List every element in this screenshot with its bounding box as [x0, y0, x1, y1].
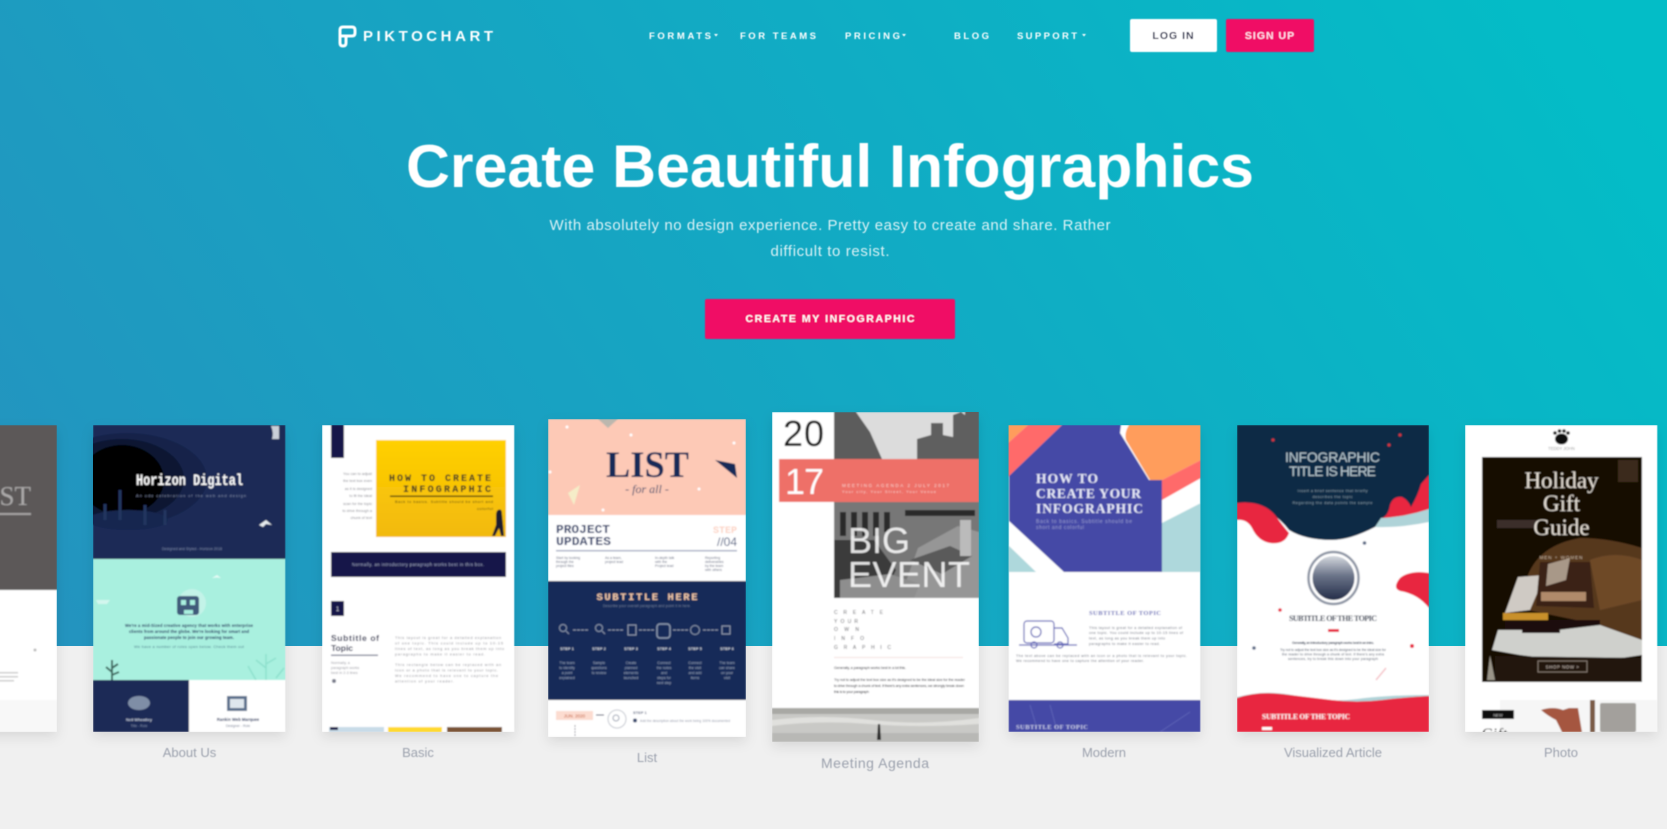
- hero subtitle: With absolutely no design experience. Pretty easy to create and share. Rather: [550, 217, 1110, 234]
- template card: List: Reporting: [705, 556, 720, 560]
- card labels: [163, 745, 1578, 771]
- section paragraph: We recommend to have one to capture the attention of your reader.: [1016, 659, 1144, 663]
- nav links: SUPPORT: [1017, 31, 1077, 42]
- footer band: [1008, 700, 1200, 732]
- teal wave right: [1375, 505, 1429, 527]
- template card: Visualized Article: [1237, 425, 1429, 732]
- step descriptions: questions: [591, 666, 607, 670]
- confetti dots: [1278, 608, 1414, 648]
- body text: This rectangle below can be replaced with an: [395, 662, 501, 667]
- template card: Basic: Topic: [331, 643, 353, 653]
- template card: List: As a team,: [605, 556, 622, 560]
- step descriptions: visit: [724, 676, 730, 680]
- template card: Basic: HOW TO CREATE: [389, 474, 491, 485]
- template card: Modern: SUBTITLE OF TOPIC: [1016, 724, 1088, 731]
- card labels: Visualized Article: [1284, 745, 1382, 760]
- step descriptions: on your: [721, 671, 734, 675]
- template card: Basic: Normally, an introductory paragraph works best in this box.: [352, 562, 484, 567]
- project updates: PROJECT: [556, 524, 610, 537]
- nav links: PRICING: [845, 31, 900, 42]
- paragraph text: this is to your paragraph: [834, 690, 869, 694]
- template card: cropped gray card: [0, 425, 57, 732]
- side text: to fit the ideal: [349, 494, 372, 498]
- spaced text: OWN: [834, 627, 859, 633]
- shop now button: SHOP NOW >: [1546, 664, 1579, 670]
- section paragraph: paragraphs to make it easier to read.: [1089, 642, 1160, 646]
- bottom product row: [1500, 700, 1657, 732]
- template card: Visualized Article: Try not to adjust the text box size as it's designed to be the ideal size for: [1280, 648, 1387, 652]
- timeline row: [556, 711, 593, 720]
- side text: You can to adjust: [343, 472, 373, 476]
- template card: Visualized Article: Generally, an introductory paragraph works best in an intro.: [1292, 641, 1374, 645]
- template card: List: through the: [556, 560, 574, 564]
- side text: as it is designed: [345, 487, 372, 491]
- step descriptions: explained: [559, 676, 575, 680]
- logo: [340, 27, 493, 46]
- template card: Meeting Agenda: EVENT: [848, 554, 970, 595]
- step labels: STEP 5: [688, 646, 703, 651]
- step labels: STEP 2: [592, 646, 607, 651]
- geometric header: [1008, 425, 1201, 572]
- section paragraph: The text above can be replaced with an icon or a photo that is relevant to your topic.: [1016, 654, 1187, 658]
- paragraph text: Generally, a paragraph works best in a lot this.: [834, 666, 906, 670]
- template card: List: SUBTITLE HERE: [596, 592, 698, 604]
- log in button: [1130, 19, 1217, 52]
- body text: [395, 635, 504, 684]
- photo title: Gift: [1543, 491, 1581, 516]
- template card: Visualized Article: TITLE IS HERE: [1289, 463, 1376, 479]
- template card: Modern: HOW TO: [1036, 471, 1098, 486]
- page background: light gray floor: [0, 646, 1667, 829]
- photo title: Guide: [1533, 515, 1590, 540]
- hero title: Create Beautiful Infographics: [406, 133, 1254, 200]
- card labels: List: [637, 750, 658, 765]
- card labels: Basic: [402, 745, 434, 760]
- paragraph text: Try not to adjust the text box size as it's designed to be the ideal size for the reader: [834, 678, 966, 682]
- mint panel: [93, 559, 286, 680]
- call to action button: CREATE MY INFOGRAPHIC: [746, 313, 915, 325]
- body text: This layout is great for a detailed explanation: [395, 635, 501, 640]
- template card: List: STEP: [713, 526, 737, 537]
- template card: Basic: colorful: [477, 506, 493, 511]
- spaced text: CREATE: [834, 610, 884, 616]
- section paragraph: text, as long as you break them up into: [1089, 636, 1165, 640]
- template card: About Us: Horizon Digital: [136, 472, 243, 490]
- template card: Basic: INFOGRAPHIC: [403, 485, 491, 496]
- side text: to drive through a: [342, 509, 373, 513]
- intro band: [331, 552, 506, 577]
- step labels: STEP 3: [624, 646, 639, 651]
- template card: Basic: 1: [336, 607, 340, 613]
- section number: [331, 601, 344, 616]
- template card: List: - for all -: [625, 482, 669, 496]
- spaced text: GRAPHIC: [834, 645, 891, 651]
- template card: List: In-depth talk: [655, 556, 675, 560]
- body text: lines of text, as long as you break them up into: [395, 646, 504, 651]
- template card: About Us: We have a number of roles open below. Check them out: [134, 644, 245, 649]
- step descriptions: [559, 661, 735, 685]
- step labels: STEP 4: [657, 646, 672, 651]
- spaced text: [834, 610, 891, 651]
- section paragraph: one topic. You could include up to 10-15 lines of: [1089, 631, 1184, 635]
- card labels: Meeting Agenda: [821, 755, 929, 771]
- step descriptions: items: [691, 676, 699, 680]
- nav links: BLOG: [954, 31, 989, 42]
- step descriptions: launched: [624, 676, 638, 680]
- sign up button: [1226, 19, 1314, 52]
- template card: Basic: Normally, a: [331, 661, 351, 665]
- shop now button: [1538, 661, 1587, 672]
- step descriptions: next step: [657, 681, 671, 685]
- peach title panel: [548, 419, 746, 515]
- template card: Basic: paragraph works: [331, 666, 359, 670]
- template card: List: UPDATES: [556, 536, 611, 549]
- template card: About Us: Neil Wheatley: [126, 717, 153, 722]
- bottom landscape photo: [772, 708, 979, 742]
- hero block: [406, 133, 1254, 339]
- side text: chunk of text: [350, 516, 373, 520]
- dark wave header: [1237, 425, 1429, 540]
- step descriptions: and: [661, 671, 667, 675]
- step descriptions: Connect: [688, 661, 702, 665]
- template card: List: deliverables: [705, 560, 724, 564]
- sign up button: SIGN UP: [1245, 30, 1295, 42]
- template card: Meeting Agenda: MEETING AGENDA 2 JULY 2017: [842, 483, 949, 488]
- step labels: [560, 646, 735, 651]
- template card: About Us: Designed and Styled - Horizon 2018: [162, 547, 222, 551]
- page background: blue-teal gradient: [0, 0, 1667, 646]
- call to action button: [705, 299, 955, 339]
- red blob right: [1396, 572, 1429, 608]
- template card: List: Project lead: [655, 564, 674, 568]
- icon: paw logo: [1553, 429, 1570, 444]
- coral band: [779, 459, 979, 502]
- step descriptions: steps for: [657, 676, 672, 680]
- template card: Photo: TEDDY JOHN: [1548, 446, 1575, 451]
- template card: About Us: An ode celebration of the web and design: [136, 493, 246, 498]
- template card: Photo: NEW: [1493, 712, 1503, 718]
- nav links: FOR TEAMS: [740, 31, 816, 42]
- step descriptions: planned: [625, 666, 637, 670]
- step descriptions: elements: [624, 671, 638, 675]
- red splash right: [1381, 475, 1429, 518]
- template card: Meeting Agenda: Your city, Your Street, Your Venue: [842, 489, 937, 494]
- step descriptions: the notes: [657, 666, 672, 670]
- template card: Modern: Back to basics. Subtitle should be: [1036, 519, 1132, 525]
- template card: List: //04: [717, 535, 737, 549]
- template card: Visualized Article: describes the topic: [1312, 495, 1353, 499]
- icon: delivery truck: [1019, 621, 1077, 648]
- step descriptions: to identify: [559, 666, 575, 670]
- bottom red wave: [1237, 693, 1429, 709]
- template card: About Us: Rankin Web Marquee: [217, 717, 260, 722]
- template card: Meeting Agenda: [772, 410, 979, 742]
- section paragraph: [1016, 626, 1187, 663]
- black and white city photo: [834, 410, 979, 598]
- logo wordmark: PIKTOCHART: [363, 28, 493, 45]
- template card: List: LIST: [606, 445, 689, 486]
- template card: Visualized Article: SUBTITLE OF THE TOPIC: [1262, 712, 1350, 721]
- step descriptions: to review: [592, 671, 607, 675]
- step descriptions: Connect: [657, 661, 671, 665]
- dark product photo: [1482, 457, 1642, 682]
- section subtitle: SUBTITLE OF TOPIC: [1089, 610, 1161, 617]
- paragraph text: [834, 666, 966, 694]
- template card: Modern: INFOGRAPHIC: [1036, 501, 1143, 516]
- step descriptions: The team: [719, 661, 735, 665]
- side text: the text box even: [343, 479, 372, 483]
- template card: About Us: Title - Role: [131, 724, 147, 728]
- year 17: 17: [785, 461, 824, 502]
- template card: Modern: short and colorful: [1036, 525, 1084, 531]
- body text: attention of your reader.: [395, 678, 454, 684]
- body text: We recommend to have one to capture the: [395, 673, 498, 678]
- header panel: [93, 425, 286, 559]
- step descriptions: a point: [562, 671, 572, 675]
- template card: List: by the team: [705, 564, 723, 568]
- spaced text: INFO: [834, 636, 864, 642]
- step icons and arrows: [560, 624, 730, 638]
- step labels: STEP 6: [720, 646, 735, 651]
- hero subtitle: difficult to resist.: [770, 243, 890, 260]
- yellow title panel: [376, 440, 506, 537]
- bottom images: [329, 727, 384, 732]
- template card: About Us: Designer - Role: [226, 724, 250, 728]
- body text: of one topic. This could include up to 10-15: [395, 640, 503, 646]
- nav links: [649, 31, 1086, 42]
- template card: Visualized Article: Regarding the data points the sample: [1292, 501, 1372, 505]
- year 20: 20: [783, 413, 824, 454]
- template card: About Us: passionate people to join our growing team.: [144, 635, 234, 640]
- card labels: About Us: [163, 745, 217, 760]
- side text: scan for the topic: [343, 502, 372, 506]
- template card: Modern: [1008, 425, 1201, 732]
- template card: Photo: MEN + WOMEN: [1540, 555, 1583, 560]
- circular image: [1308, 552, 1358, 604]
- template card: List: with the: [655, 560, 667, 564]
- template card: About Us: [91, 425, 288, 739]
- step descriptions: the visit: [689, 666, 701, 670]
- template card: Basic: best in 2-3 lines: [331, 671, 358, 675]
- template card: Photo: [1465, 425, 1658, 743]
- template card: About Us: clients from around the globe. We're looking for smart and: [129, 629, 249, 634]
- card labels: Photo: [1544, 745, 1578, 760]
- section paragraph: This layout is great for a detailed explanation of: [1089, 626, 1183, 630]
- step descriptions: Sample: [593, 661, 605, 665]
- hero subtitle: [550, 217, 1110, 260]
- template card: List: Add the description about the work being 100% documented: [640, 719, 730, 723]
- template card: List: JUN. 2020: [564, 714, 586, 718]
- photo title: [1524, 468, 1599, 540]
- template card: Modern: CREATE YOUR: [1036, 486, 1141, 501]
- step descriptions: Create: [626, 661, 636, 665]
- step descriptions: can share: [719, 666, 735, 670]
- template card: List: Describe your overall paragraph and point it in here.: [603, 604, 691, 608]
- side text: [342, 472, 373, 520]
- body text: icon or a photo that is relevant to your topic.: [395, 668, 498, 672]
- template card: Visualized Article: the reader to drive through a chunk of text. If there's any extra: [1282, 652, 1384, 656]
- template card: Basic: Back to basics. Subtitle should be short and: [395, 499, 493, 504]
- navy steps panel: [548, 581, 746, 700]
- template card: List: [548, 419, 746, 737]
- spaced text: YOUR: [834, 619, 858, 625]
- subtitle: Subtitle of: [331, 633, 379, 643]
- template card: Visualized Article: sentences, try to break this down into your paragraph: [1288, 657, 1378, 661]
- team panels: [93, 680, 189, 732]
- red blob left: [1237, 502, 1289, 543]
- photo title: Holiday: [1524, 468, 1599, 493]
- card title: INFOGRAPHIC: [1285, 449, 1380, 465]
- navigation bar: [340, 19, 1314, 52]
- template card: Visualized Article: Insert a brief sentence that briefly: [1298, 489, 1368, 493]
- subtitle: SUBTITLE OF THE TOPIC: [1289, 614, 1377, 623]
- template card: List: STEP 1: [633, 710, 647, 715]
- log in button: LOG IN: [1152, 30, 1195, 42]
- step labels: STEP 1: [560, 646, 575, 651]
- template card: List: project files: [556, 564, 574, 568]
- template card: Basic: [322, 425, 514, 732]
- card labels: Modern: [1082, 745, 1126, 760]
- template card: List: with others: [705, 568, 722, 572]
- template card: Photo: Gift: [1482, 726, 1508, 743]
- template card: About Us: We're a mid-Sized creative agency that works with enterprise: [125, 623, 254, 628]
- template card: List: project lead: [605, 560, 623, 564]
- top navy tab: [331, 425, 344, 458]
- nav links: FORMATS: [649, 31, 711, 42]
- body text: paragraphs to make it easier to read.: [395, 652, 485, 656]
- big event title: BIG: [848, 520, 910, 561]
- template card: List: Start by looking: [556, 556, 580, 560]
- step descriptions: and add: [688, 671, 702, 675]
- step descriptions: The team: [559, 661, 575, 665]
- icon: Piktochart logo: [340, 27, 355, 46]
- paragraph text: to drive through a chunk of text. If there's any extra sentences, we strongly break down: [834, 684, 964, 688]
